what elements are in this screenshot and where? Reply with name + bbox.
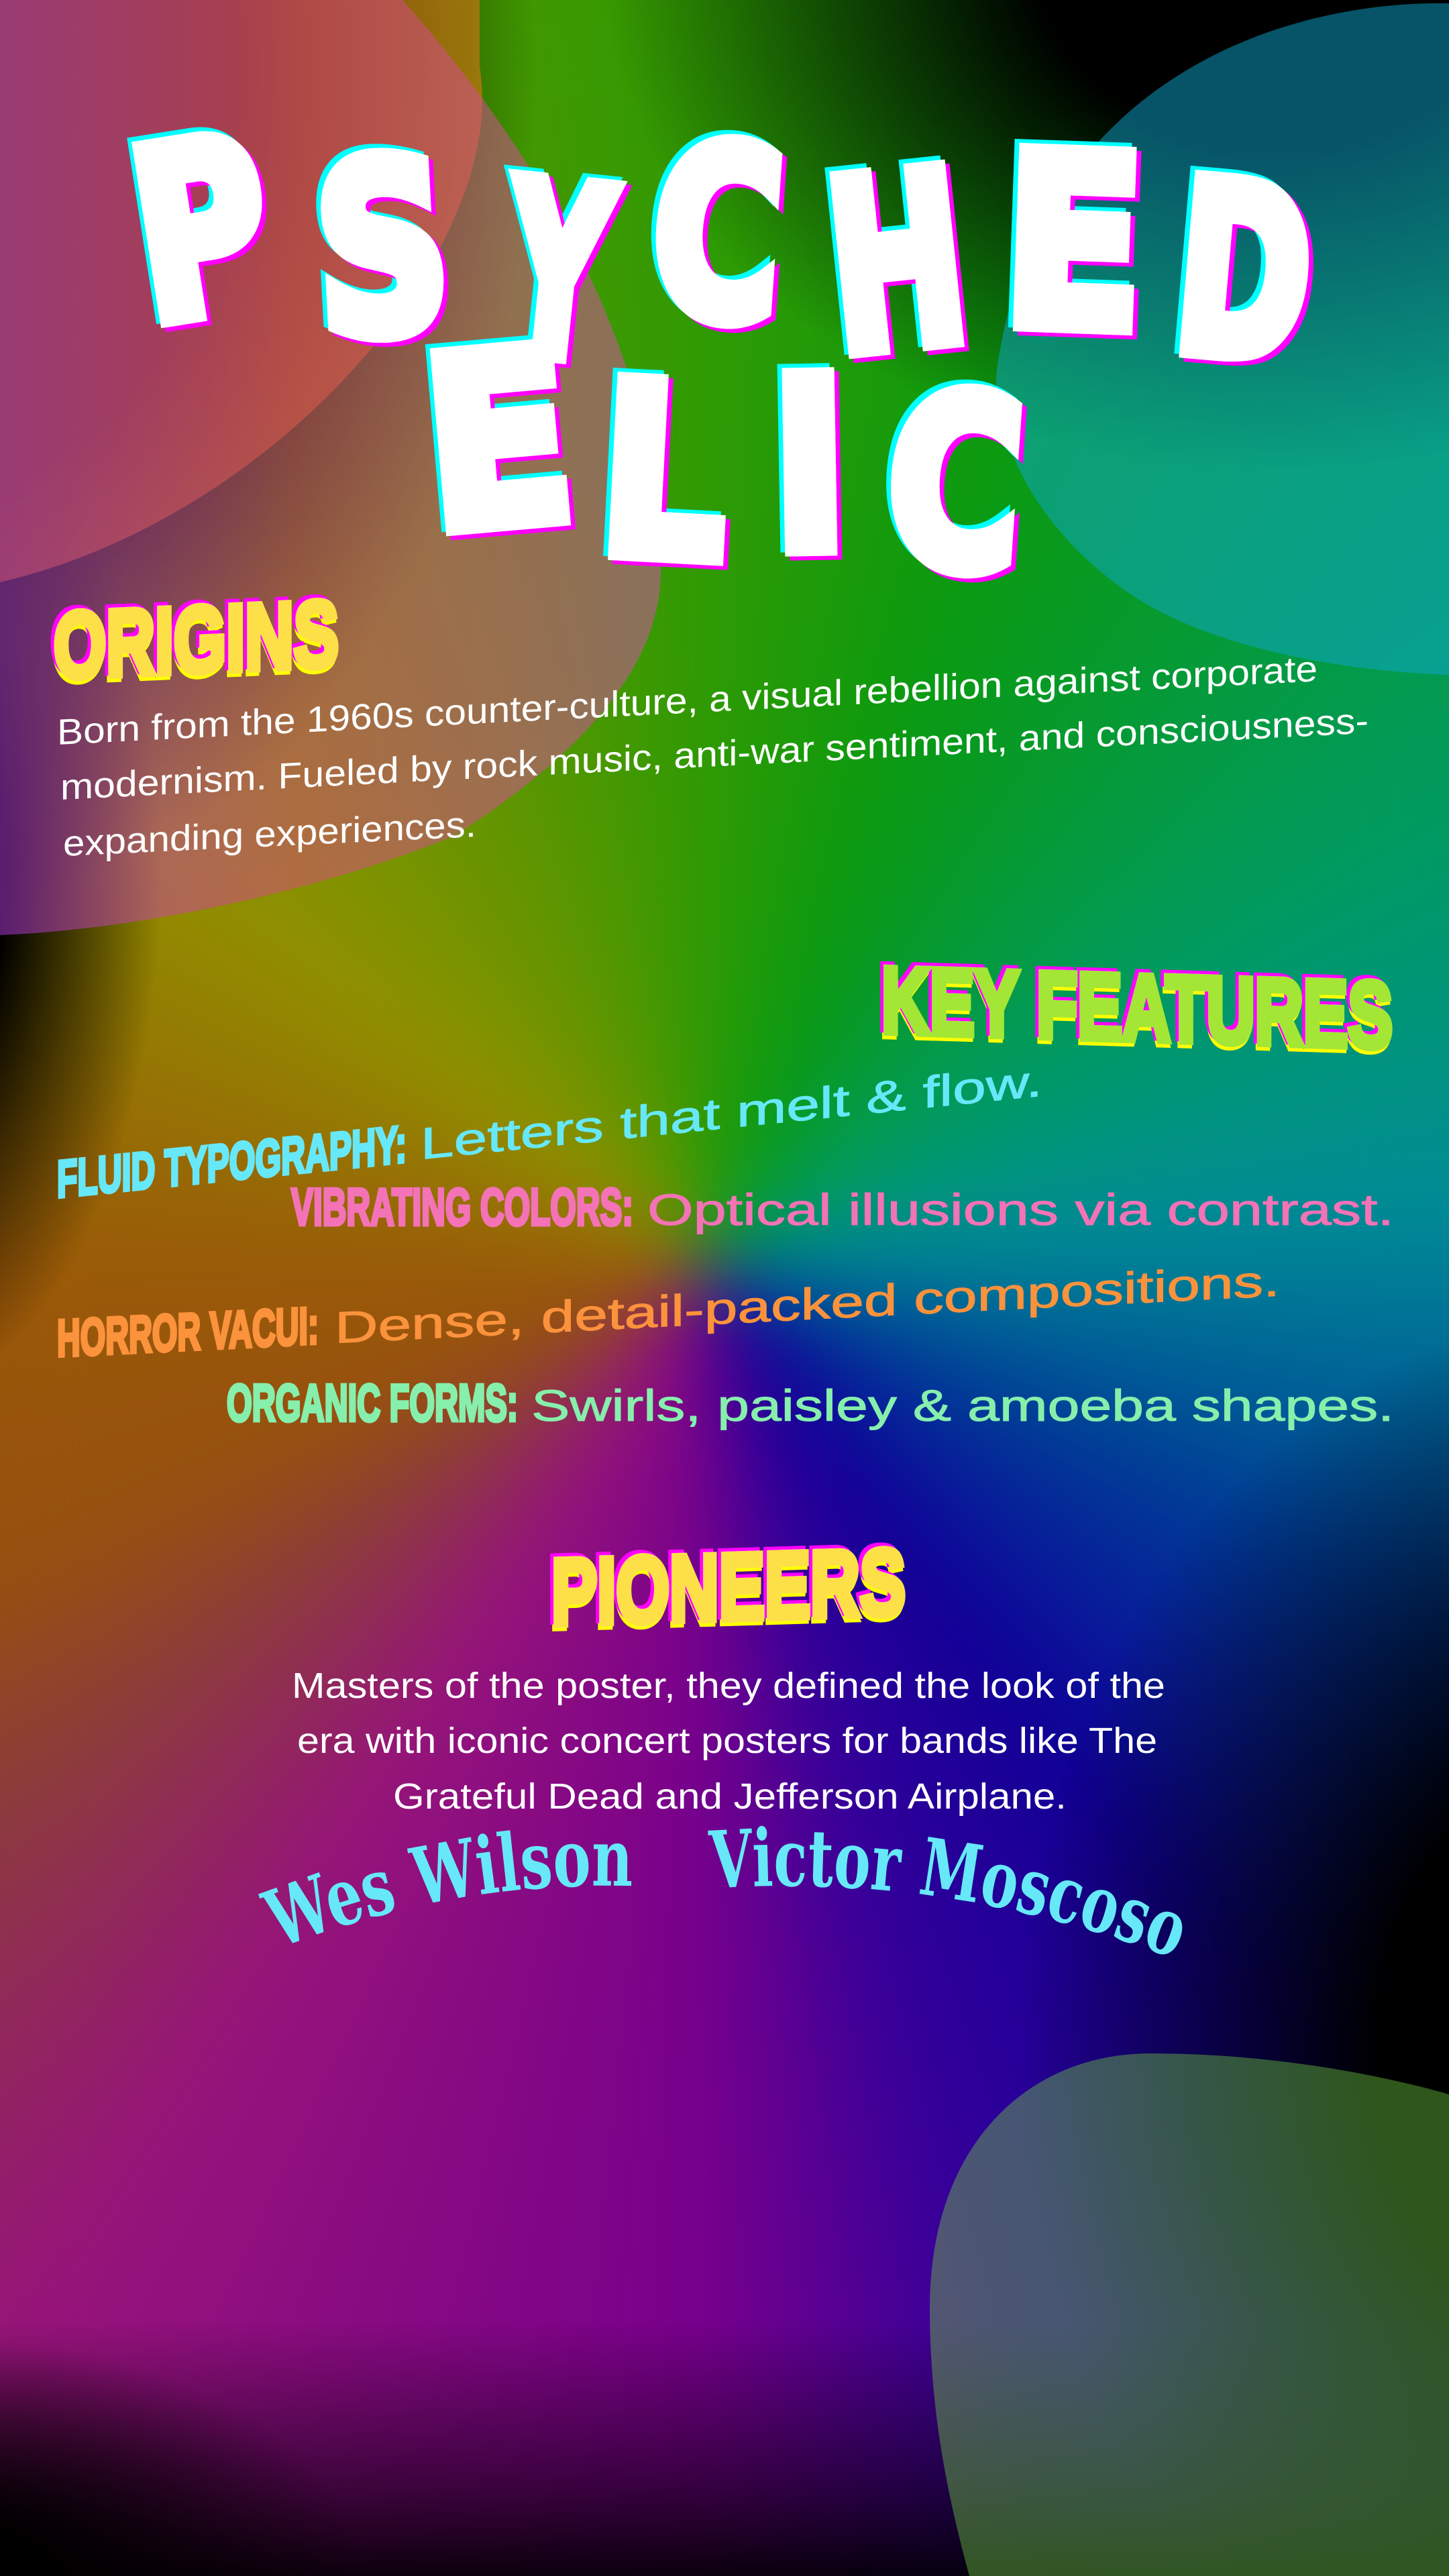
feature: horror vacui: HORROR VACUI: [57, 1296, 319, 1368]
title line 2: ELIC: E [415, 299, 583, 584]
title line 1: PSYCHED: P [116, 86, 288, 376]
heading: Pioneers: PIONEERS [551, 1529, 906, 1645]
title line 2: ELIC [415, 299, 1030, 625]
text: origins body: modernism. Fueled by rock music, anti-war sentiment, and consciousness- [60, 701, 1368, 808]
text: origins body [57, 649, 1368, 864]
name: Wes Wilson: Wes Wilson [258, 1830, 632, 1943]
feature: fluid typography [57, 1057, 1042, 1209]
title [116, 86, 1322, 625]
feature: fluid typography: FLUID TYPOGRAPHY: [57, 1114, 407, 1209]
text: pioneers body: Grateful Dead and Jefferson Airplane. [393, 1776, 1067, 1817]
blob: top-left pink [0, 0, 661, 935]
text: pioneers body [292, 1666, 1165, 1817]
feature: horror vacui: Dense, detail-packed compositions. [335, 1256, 1280, 1352]
blob: bottom-right lime [930, 2053, 1449, 2576]
heading: Origins: ORIGINS [54, 580, 339, 698]
title line 1: PSYCHED [116, 86, 1322, 415]
feature: fluid typography: Letters that melt & flow. [421, 1057, 1042, 1169]
title line 2: ELIC: I [770, 329, 849, 604]
title line 1: PSYCHED: D [1166, 131, 1322, 415]
title line 2: ELIC: C [879, 343, 1030, 625]
feature: vibrating colors [291, 1177, 1394, 1236]
title line 1: PSYCHED: S [310, 111, 455, 390]
title line 2: ELIC: L [595, 333, 733, 612]
text: pioneers body: Masters of the poster, they defined the look of the [292, 1666, 1165, 1706]
feature: organic forms: ORGANIC FORMS: [227, 1373, 518, 1432]
feature: organic forms [227, 1373, 1394, 1432]
text: pioneers body: era with iconic concert posters for bands like The [297, 1721, 1157, 1761]
title line 1: PSYCHED: E [1000, 105, 1148, 382]
title line 1: PSYCHED: Y [492, 132, 623, 415]
blob: top-right blue [996, 3, 1449, 675]
title line 1: PSYCHED: H [816, 121, 978, 407]
name: Victor Moscoso: Victor Moscoso [708, 1826, 1182, 1955]
text: origins body: expanding experiences. [63, 804, 476, 864]
feature: vibrating colors: VIBRATING COLORS: [291, 1177, 633, 1236]
title line 1: PSYCHED: C [644, 94, 791, 376]
feature: organic forms: Swirls, paisley & amoeba shapes. [531, 1381, 1394, 1430]
feature: horror vacui [57, 1256, 1280, 1368]
text: origins body: Born from the 1960s counter-culture, a visual rebellion against corporate [57, 649, 1318, 753]
feature: vibrating colors: Optical illusions via contrast. [647, 1185, 1394, 1234]
blob: top-left orange [0, 0, 482, 582]
